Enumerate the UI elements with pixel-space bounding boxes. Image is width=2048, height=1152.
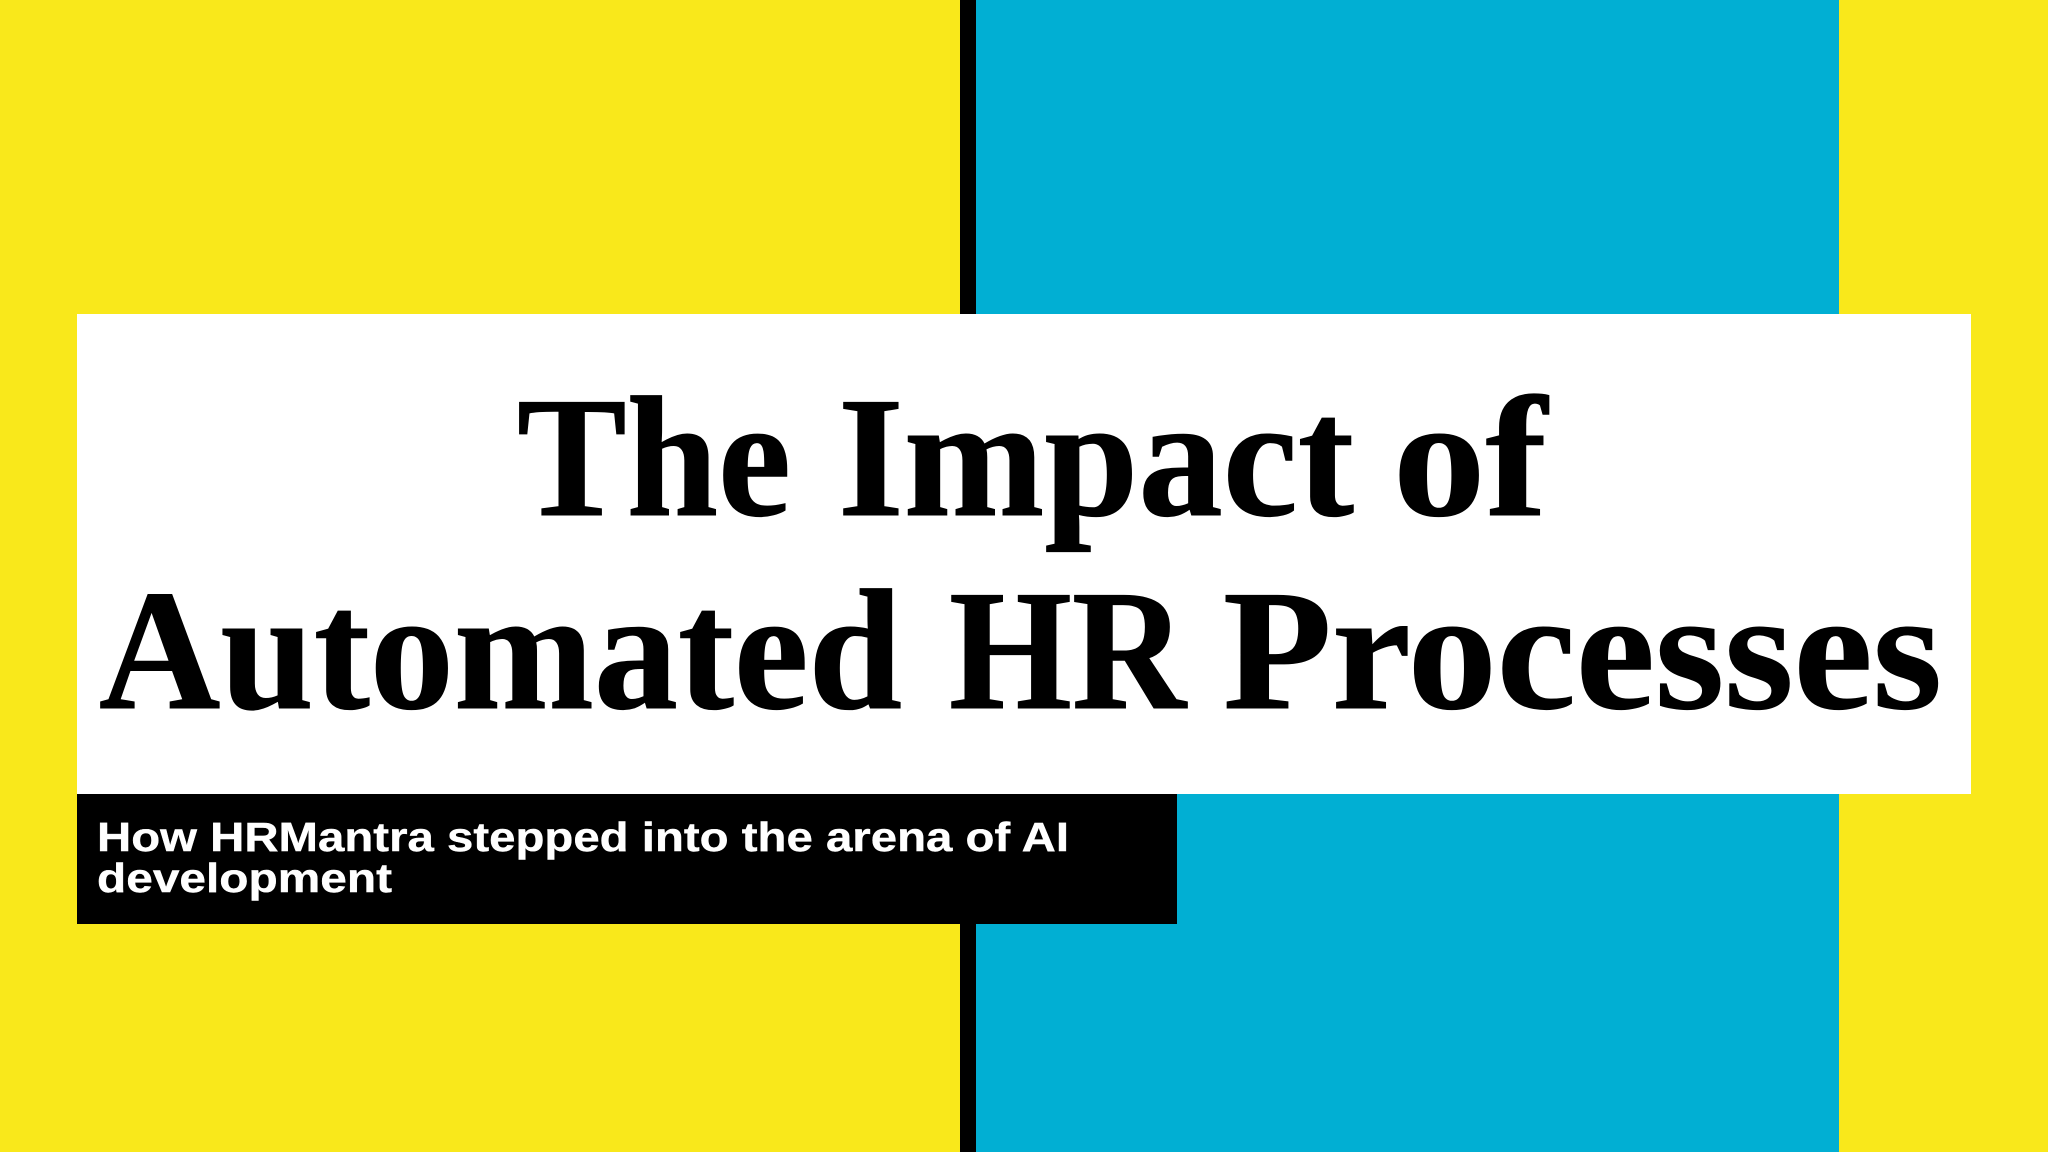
title: HR — [949, 556, 1188, 746]
panel: white title band — [77, 314, 1971, 794]
title: Automated — [99, 556, 902, 746]
subtitle: How HRMantra stepped into the arena of AI — [97, 814, 1069, 860]
title: The — [517, 363, 791, 553]
background: blue vertical panel — [976, 0, 1839, 1152]
title: Impact — [838, 363, 1354, 553]
title: Processes — [1223, 556, 1942, 746]
subtitle — [97, 814, 1069, 901]
title: of — [1393, 363, 1549, 553]
background: black vertical stripe — [960, 0, 976, 1152]
panel: black subtitle box — [77, 794, 1177, 924]
title — [99, 363, 1942, 746]
subtitle: development — [97, 855, 392, 901]
